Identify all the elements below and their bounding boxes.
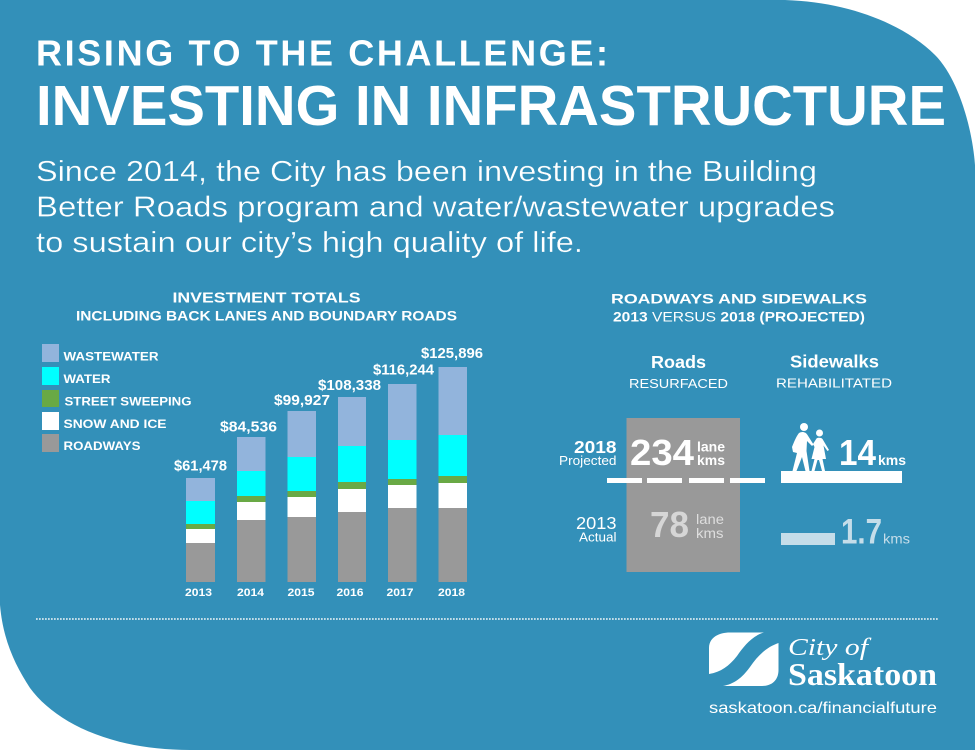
intro text xyxy=(36,156,835,259)
heading: investment totals: INCLUDING BACK LANES AND BOUNDARY ROADS xyxy=(76,308,457,324)
legend: SNOW AND ICE xyxy=(64,419,167,431)
stat: 234 lane kms: lane xyxy=(697,440,726,455)
logo wordmark xyxy=(788,635,937,692)
bar 2017 xyxy=(373,362,435,599)
bar 2016: $108,338 xyxy=(318,377,381,394)
stat: 1.7 kms with sidewalk bar: kms xyxy=(883,530,910,546)
stat: 78 lane kms xyxy=(650,504,724,545)
stat: 234 lane kms: kms xyxy=(697,453,725,468)
legend xyxy=(42,344,192,453)
intro text: to sustain our city’s high quality of life. xyxy=(36,227,583,259)
stat: 78 lane kms: 78 xyxy=(650,504,689,545)
icon: two pedestrians xyxy=(792,423,829,471)
heading: roadways and sidewalks: 2013 VERSUS 2018 (PROJECTED) xyxy=(613,310,865,324)
column heading: roads: Roads xyxy=(651,352,706,372)
bar 2014: 2014 xyxy=(237,587,265,599)
column heading: sidewalks: Sidewalks xyxy=(790,352,879,372)
intro text: Better Roads program and water/wastewater upgrades xyxy=(36,192,835,224)
legend: STREET SWEEPING xyxy=(64,396,192,408)
label: 2018 projected xyxy=(559,437,617,468)
dashed divider xyxy=(607,478,765,483)
bar 2015: $99,927 xyxy=(274,392,330,409)
label: 2018 projected: Projected xyxy=(559,454,617,468)
stat: 1.7 kms with sidewalk bar xyxy=(781,512,910,552)
bar 2017: 2017 xyxy=(386,587,414,599)
logo wordmark: Saskatoon xyxy=(788,656,937,692)
bar 2016: 2016 xyxy=(336,587,364,599)
legend: WASTEWATER xyxy=(64,352,159,364)
bar 2018: 2018 xyxy=(438,587,465,599)
title: RISING TO THE CHALLENGE: xyxy=(36,32,608,74)
label: 2018 projected: 2018 xyxy=(574,437,617,457)
intro text: Since 2014, the City has been investing in the Building xyxy=(36,156,817,188)
bar 2014 xyxy=(220,418,277,599)
website url: saskatoon.ca/financialfuture xyxy=(709,700,937,717)
bar 2017: $116,244 xyxy=(373,362,435,378)
stat: 234 lane kms xyxy=(630,432,726,473)
column heading: sidewalks xyxy=(776,352,892,390)
stat: 234 lane kms: 234 xyxy=(630,432,694,473)
legend: WATER xyxy=(64,374,111,386)
stat: 14 kms with sidewalk bar: 14 xyxy=(839,432,876,473)
bar 2013: $61,478 xyxy=(174,458,227,475)
logo wordmark: City of xyxy=(788,635,872,661)
stacked bar chart xyxy=(174,345,483,599)
bar 2013 xyxy=(174,458,227,599)
heading: investment totals xyxy=(76,290,457,324)
logo mark xyxy=(709,632,778,686)
title xyxy=(36,32,946,138)
bar 2018: $125,896 xyxy=(421,345,483,362)
bar 2013: 2013 xyxy=(185,587,212,599)
label: 2013 actual: Actual xyxy=(579,531,616,545)
bar 2018 xyxy=(421,345,483,599)
stat: 14 kms with sidewalk bar: kms xyxy=(878,452,906,468)
title: INVESTING IN INFRASTRUCTURE xyxy=(36,74,946,138)
column heading: roads: RESURFACED xyxy=(629,376,728,391)
label: 2013 actual: 2013 xyxy=(576,513,616,533)
heading: investment totals: INVESTMENT TOTALS xyxy=(172,290,360,306)
stat: 14 kms with sidewalk bar xyxy=(781,432,906,483)
column heading: sidewalks: REHABILITATED xyxy=(776,376,892,390)
bar 2016 xyxy=(318,377,381,599)
bar 2015 xyxy=(274,392,330,599)
heading: roadways and sidewalks: ROADWAYS AND SIDEWALKS xyxy=(611,290,867,306)
heading: roadways and sidewalks xyxy=(611,290,867,324)
column heading: roads xyxy=(629,352,728,391)
stat: 78 lane kms: lane xyxy=(696,512,724,527)
stat: 1.7 kms with sidewalk bar: 1.7 xyxy=(841,512,882,552)
legend: ROADWAYS xyxy=(64,441,141,453)
label: 2013 actual xyxy=(576,513,616,545)
bar 2014: $84,536 xyxy=(220,418,277,436)
logo: City of Saskatoon xyxy=(709,632,937,692)
roads grey block xyxy=(626,418,740,572)
bar 2015: 2015 xyxy=(288,587,314,599)
stat: 78 lane kms: kms xyxy=(696,526,724,541)
